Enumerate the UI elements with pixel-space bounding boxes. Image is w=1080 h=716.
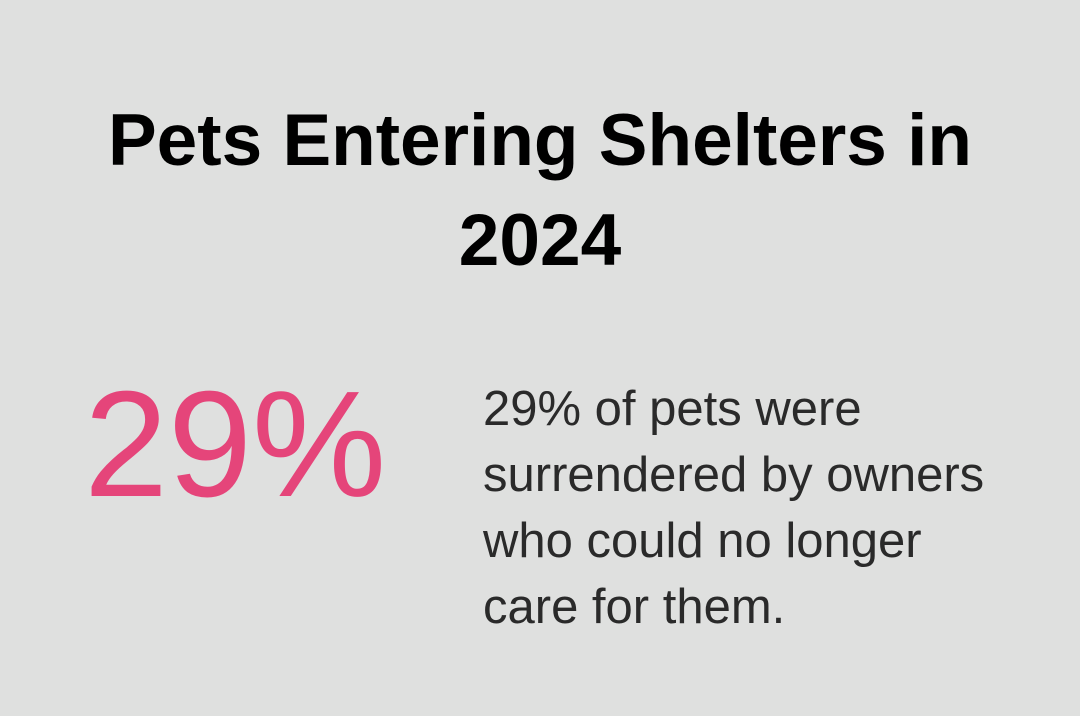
- description text: surrendered by owners: [483, 448, 984, 502]
- title: [108, 100, 972, 281]
- description text: who could no longer: [483, 514, 922, 568]
- description text: care for them.: [483, 580, 785, 634]
- description text: 29% of pets were: [483, 382, 862, 436]
- title: Pets Entering Shelters in: [108, 100, 972, 181]
- big statistic: 29%: 29%: [84, 359, 386, 528]
- title: 2024: [459, 200, 621, 281]
- description text: [483, 382, 984, 634]
